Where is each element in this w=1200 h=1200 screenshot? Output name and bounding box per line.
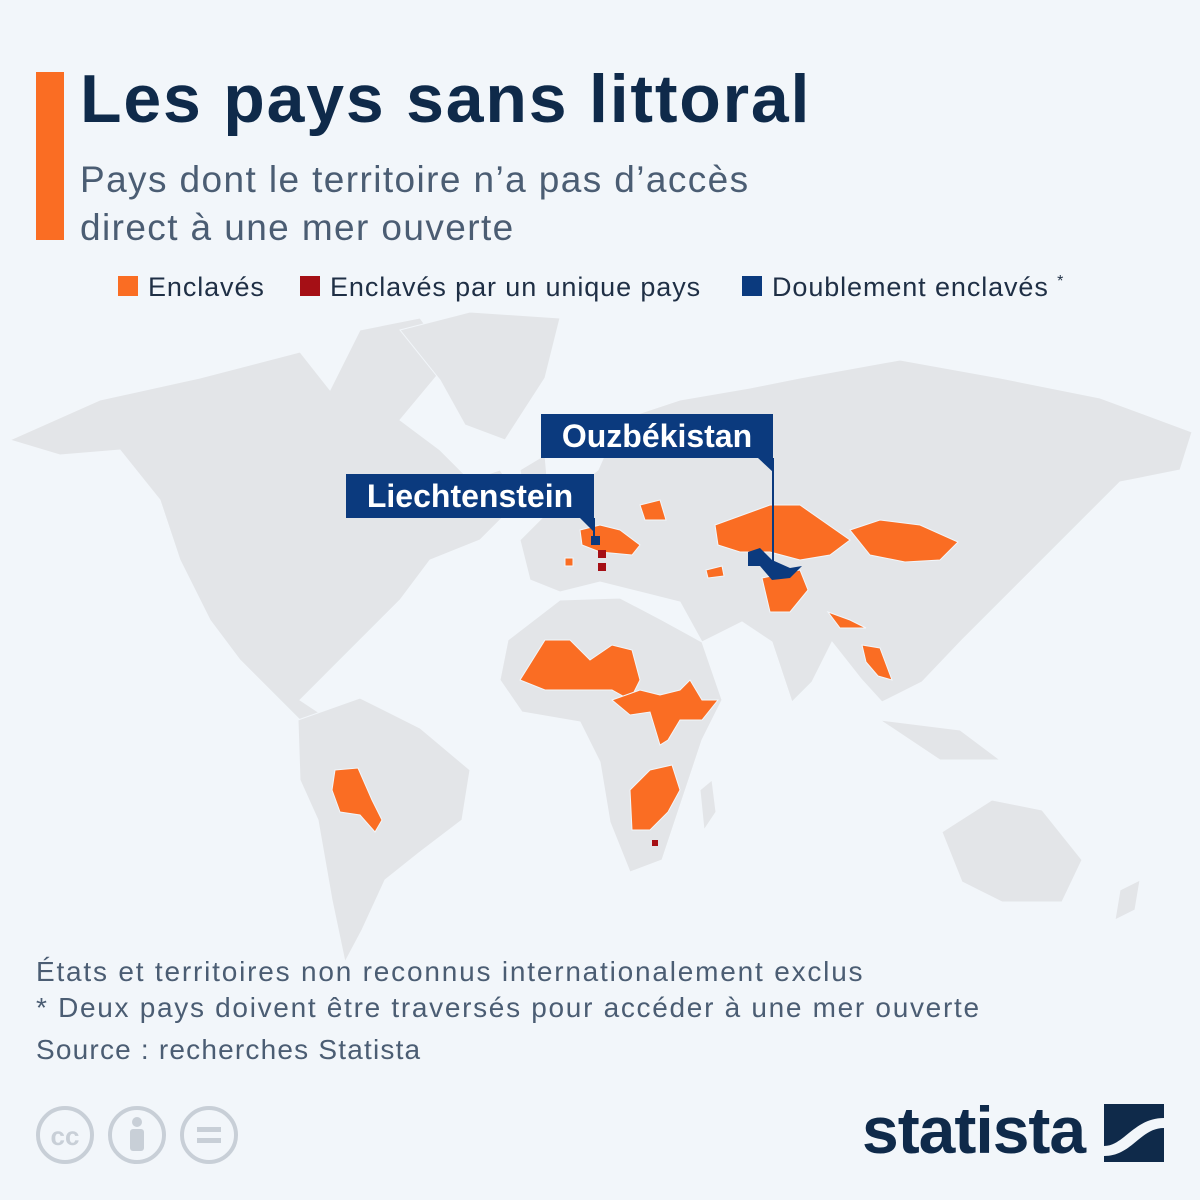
footnote: asterisk: * Deux pays doivent être traversés pour accéder à une mer ouverte: [36, 992, 981, 1023]
license icons: [36, 1106, 238, 1164]
statista logo: statista: [862, 1093, 1085, 1167]
legend: [118, 272, 1064, 302]
doubly landlocked: blue: [591, 536, 802, 580]
callout: Liechtenstein: Liechtenstein: [367, 478, 573, 514]
callout: Liechtenstein: [346, 474, 594, 538]
callout: Ouzbékistan: [541, 414, 773, 565]
license icons: cc: [51, 1121, 79, 1151]
subtitle: [80, 159, 750, 248]
footnote: exclusions: États et territoires non reconnus internationalement exclus: [36, 956, 864, 987]
single-enclave countries: dark red: [598, 550, 658, 846]
landlocked countries: orange: [332, 500, 958, 832]
accent bar: [36, 72, 64, 240]
legend item: enclavés par un unique pays: Enclavés par un unique pays: [330, 272, 701, 302]
subtitle: Pays dont le territoire n’a pas d’accès: [80, 159, 750, 200]
legend item: doublement enclavés: Doublement enclavés *: [772, 272, 1064, 302]
title: Les pays sans littoral: [80, 61, 811, 137]
legend item: enclavés: Enclavés: [148, 272, 265, 302]
subtitle: direct à une mer ouverte: [80, 207, 515, 248]
source: Source : recherches Statista: [36, 1034, 421, 1065]
callout: Ouzbékistan: Ouzbékistan: [562, 418, 752, 454]
